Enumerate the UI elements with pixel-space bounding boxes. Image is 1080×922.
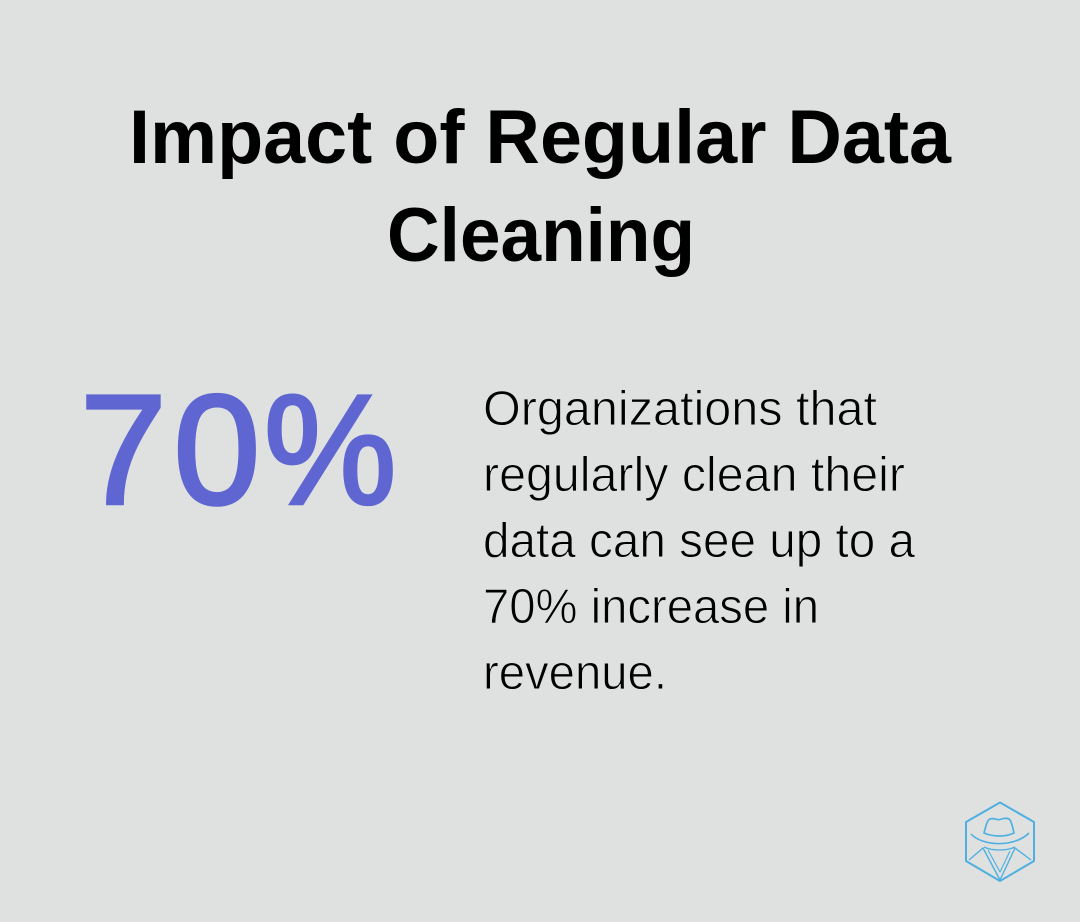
big stat: 70% bbox=[80, 363, 396, 538]
description text bbox=[483, 382, 916, 700]
title bbox=[129, 95, 952, 278]
description text: revenue. bbox=[483, 646, 667, 700]
icon: detective logo bbox=[966, 802, 1034, 881]
description text: data can see up to a bbox=[483, 514, 916, 568]
big stat: 70%: % bbox=[264, 363, 396, 537]
description text: regularly clean their bbox=[483, 448, 905, 502]
title: Cleaning bbox=[387, 193, 695, 278]
title: Impact of Regular Data bbox=[129, 95, 952, 180]
big stat: 70%: 70 bbox=[80, 364, 260, 538]
description text: Organizations that bbox=[483, 382, 877, 436]
description text: 70% increase in bbox=[483, 580, 819, 634]
